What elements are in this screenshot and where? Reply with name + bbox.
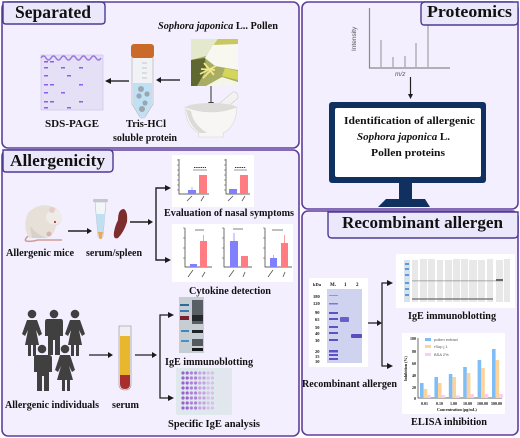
image: recombinant protein gel: 120 bbox=[313, 301, 320, 306]
chart: mass spectrum: m/z bbox=[395, 71, 406, 78]
label: IgE immunoblotting: IgE immunoblotting bbox=[165, 357, 254, 368]
icon: protein tube bbox=[131, 44, 154, 118]
chart: ELISA inhibition bars: rSop j 1 bbox=[434, 344, 449, 349]
chart: ELISA inhibition bars: 0.10 bbox=[436, 401, 443, 406]
image: recombinant protein gel: 30 bbox=[315, 338, 320, 343]
image: recombinant protein gel: kDa bbox=[313, 282, 322, 287]
image: recombinant protein gel: 90 bbox=[315, 310, 320, 315]
image: recombinant protein gel: 1 bbox=[344, 283, 347, 288]
label: evaluation of nasal symptoms: Evaluation of nasal symptoms bbox=[164, 208, 294, 219]
icon: allergenic individuals group bbox=[22, 310, 85, 391]
chart: ELISA inhibition bars bbox=[402, 333, 505, 414]
panel: recombinant allergen bbox=[302, 211, 518, 435]
arrow: mouse results bracket bbox=[156, 185, 171, 263]
label: recombinant allergen: Recombinant allergen bbox=[302, 379, 397, 390]
image: recombinant protein gel: 50 bbox=[315, 325, 320, 330]
image: recombinant protein gel: 10 bbox=[315, 359, 320, 364]
chart: ELISA inhibition bars: 80 bbox=[412, 349, 416, 354]
arrow: recombinant bracket bbox=[382, 280, 393, 369]
chart: ELISA inhibition bars: pollen extract bbox=[434, 337, 459, 342]
arrow: samples to bracket bbox=[130, 219, 153, 225]
heading: Recombinant allergen: Recombinant allergen bbox=[342, 213, 504, 232]
chart: ELISA inhibition bars: BSA 2% bbox=[434, 352, 449, 357]
image: IgE blot bbox=[179, 297, 204, 353]
arrow: mouse to samples bbox=[68, 228, 92, 234]
label: Tris-HCl soluble protein: soluble protein bbox=[113, 133, 177, 144]
arrow: tube to gel bbox=[105, 78, 129, 84]
panel: proteomics bbox=[302, 2, 518, 209]
heading: Separated bbox=[3, 2, 105, 24]
chart: ELISA inhibition bars: Concentration (µg/mL) bbox=[437, 407, 477, 412]
chart: ELISA inhibition bars: 10.00 bbox=[463, 401, 472, 406]
chart: cytokine bars bbox=[172, 224, 293, 282]
icon: computer monitor with result text: Sophora japonica L. bbox=[357, 131, 450, 143]
chart: ELISA inhibition bars: Inhibition (%) bbox=[403, 356, 408, 381]
label: recombinant IgE immunoblotting: IgE immunoblotting bbox=[408, 311, 497, 322]
image: recombinant protein gel: M. bbox=[330, 283, 337, 288]
heading: Recombinant allergen bbox=[328, 212, 518, 238]
label: Tris-HCl soluble protein bbox=[113, 119, 177, 144]
image: recombinant protein gel: 2 bbox=[356, 283, 359, 288]
arrow: individuals to serum bbox=[89, 352, 113, 358]
icon: computer monitor with result text bbox=[329, 102, 486, 207]
arrow: serum to bracket bbox=[135, 352, 157, 358]
image: recombinant protein gel: 65 bbox=[315, 317, 320, 322]
icon: mouse bbox=[25, 205, 62, 241]
image: flower photo bbox=[191, 39, 238, 86]
label: allergenic individuals: Allergenic individuals bbox=[5, 400, 99, 411]
image: recombinant protein gel: 180 bbox=[313, 294, 320, 299]
chart: ELISA inhibition bars: 500.00 bbox=[491, 401, 502, 406]
chart: ELISA inhibition bars: 0 bbox=[414, 396, 416, 401]
text: Sophora japonica L. Pollen: Sophora japonica L.. Pollen bbox=[158, 21, 278, 32]
arrow: human results bracket bbox=[160, 312, 174, 401]
icon: spleen bbox=[114, 209, 127, 238]
chart: mass spectrum bbox=[351, 8, 450, 78]
chart: ELISA inhibition bars: 40 bbox=[412, 373, 416, 378]
arrow: flower to tube bbox=[156, 77, 180, 83]
image: recombinant protein gel: 20 bbox=[315, 349, 320, 354]
heading: Allergenicity: Allergenicity bbox=[10, 151, 106, 170]
arrow: spectrum to monitor bbox=[408, 77, 413, 99]
heading: Proteomics: Proteomics bbox=[427, 2, 512, 21]
chart: mass spectrum: Intensity bbox=[351, 26, 358, 51]
icon: serum tube bbox=[93, 199, 108, 239]
label: serum/spleen: serum/spleen bbox=[86, 248, 142, 259]
icon: mortar and pestle bbox=[185, 92, 238, 137]
image: recombinant protein gel: 40 bbox=[315, 331, 320, 336]
image: recombinant protein gel bbox=[309, 278, 368, 367]
chart: ELISA inhibition bars: 100 bbox=[410, 336, 416, 341]
icon: SDS-PAGE gel bbox=[41, 55, 103, 110]
arrow: gel to bracket bbox=[368, 320, 382, 326]
panel: allergenicity bbox=[2, 150, 299, 436]
chart: ELISA inhibition bars: 0.01 bbox=[421, 401, 428, 406]
heading: Separated: Separated bbox=[15, 2, 91, 22]
label: SDS-PAGE: SDS-PAGE bbox=[45, 119, 99, 130]
chart: ELISA inhibition bars: 100.00 bbox=[477, 401, 488, 406]
image: recombinant IgE immunoblot bbox=[396, 254, 515, 308]
image: recombinant protein gel: 15 bbox=[315, 354, 320, 359]
chart: nasal symptom bars bbox=[172, 155, 254, 207]
label: cytokine detection: Cytokine detection bbox=[189, 286, 271, 297]
label: Tris-HCl soluble protein: Tris-HCl bbox=[126, 119, 166, 130]
chart: ELISA inhibition bars: 20 bbox=[412, 385, 416, 390]
chart: ELISA inhibition bars: 60 bbox=[412, 361, 416, 366]
heading: Proteomics bbox=[421, 2, 518, 25]
panel: separated bbox=[2, 2, 299, 148]
icon: computer monitor with result text: Pollen proteins bbox=[371, 147, 446, 159]
label: serum: serum bbox=[112, 400, 139, 411]
icon: blood tube bbox=[119, 326, 131, 390]
chart: ELISA inhibition bars: 1.00 bbox=[450, 401, 457, 406]
icon: ELISA well plate bbox=[176, 368, 232, 415]
label: allergenic mice: Allergenic mice bbox=[6, 248, 74, 259]
icon: computer monitor with result text: Identification of allergenic bbox=[344, 115, 475, 127]
label: specific IgE analysis: Specific IgE analysis bbox=[168, 419, 260, 430]
arrow: flower to mortar bbox=[208, 86, 214, 107]
label: ELISA inhibition: ELISA inhibition bbox=[411, 417, 487, 428]
